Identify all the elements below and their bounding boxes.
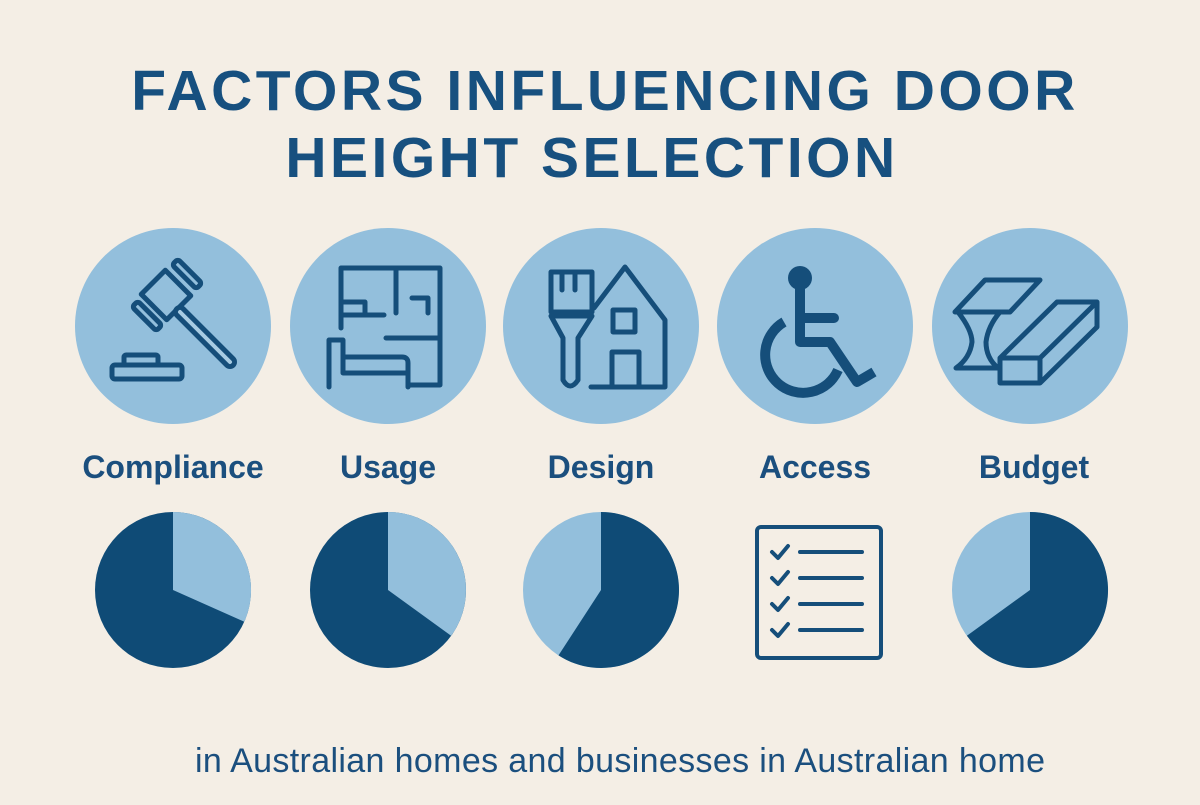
labels [82, 449, 1089, 485]
labels: Budget [979, 449, 1089, 485]
labels: Usage [340, 449, 436, 485]
icon: wheelchair [765, 266, 874, 393]
icon: paintbrush and house [551, 267, 665, 387]
pie chart: budget [952, 512, 1108, 668]
pie chart: usage [310, 512, 466, 668]
icon: building materials [955, 280, 1097, 383]
title: FACTORS INFLUENCING DOOR [131, 59, 1079, 123]
icon: checklist [757, 527, 881, 658]
pie chart: design [523, 512, 679, 668]
labels: Design [548, 449, 654, 485]
footer text: in Australian homes and businesses in Australian home [195, 742, 1045, 780]
icon: floor plan [329, 268, 440, 387]
title: HEIGHT SELECTION [285, 126, 899, 190]
icon circles row [75, 228, 1128, 424]
icon: gavel [112, 259, 230, 379]
pie chart: compliance [95, 512, 251, 668]
labels: Access [759, 449, 871, 485]
title [131, 59, 1079, 190]
labels: Compliance [82, 449, 264, 485]
